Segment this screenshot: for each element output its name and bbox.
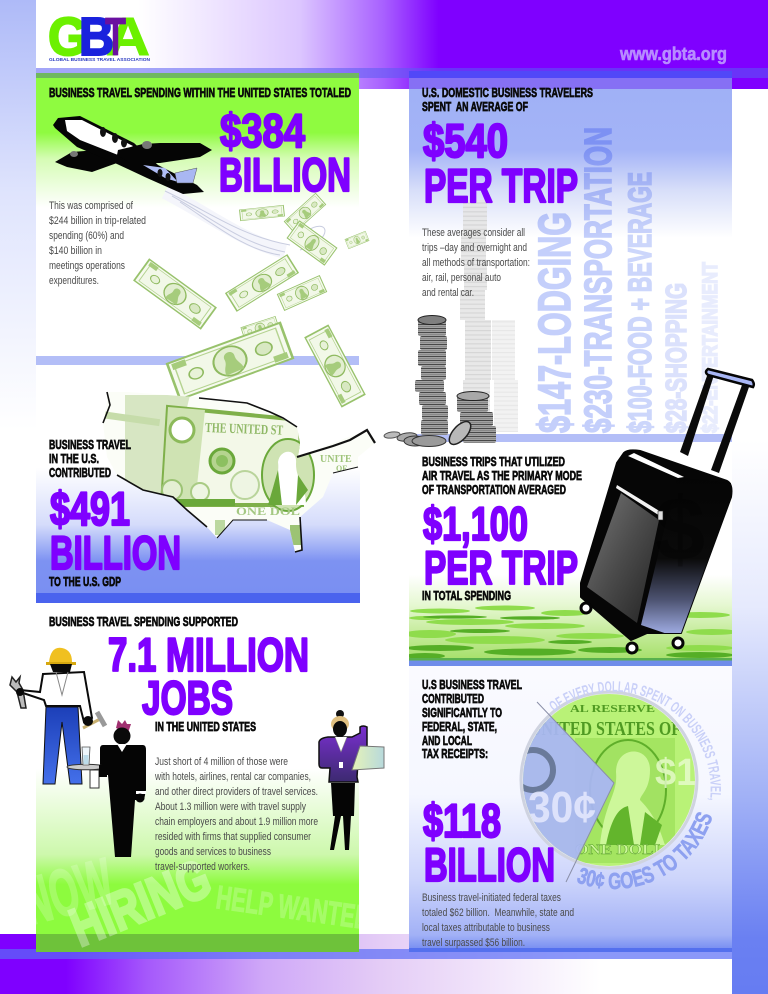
website url: www.gbta.org	[619, 44, 727, 64]
logo: GBTA: G	[48, 7, 88, 67]
icon: dollar pie circle: $1	[655, 752, 697, 794]
icon: airplane	[53, 116, 212, 194]
text block: averages note: all methods of transportation:	[422, 257, 530, 269]
vertical spending breakdown labels: $28-SHOPPING	[661, 283, 693, 433]
big number: $491 billion: BILLION	[50, 526, 181, 579]
text block: taxes detail: travel surpassed $56 billion.	[422, 937, 525, 949]
text block: spending breakdown: spending (60%) and	[49, 230, 124, 242]
icon: luggage: $	[655, 480, 705, 580]
icon: dollar pie circle: AL RESERVE	[570, 704, 655, 715]
text block: jobs detail: goods and services to business	[155, 846, 271, 858]
map: United States filled with dollar bill: ONE DOL	[236, 504, 300, 518]
text block: taxes detail	[422, 892, 574, 949]
curved text: of every dollar: OF EVERY DOLLAR SPENT ON BUSINESS TRAVEL,	[550, 681, 721, 800]
heading: air travel: OF TRANSPORTATION AVERAGED	[422, 482, 566, 497]
heading: taxes: TAX RECEIPTS:	[422, 746, 488, 761]
heading: GDP: BUSINESS TRAVEL	[49, 437, 131, 452]
text block: spending breakdown: $244 billion in trip-related	[49, 215, 146, 227]
logo: GBTA: GLOBAL BUSINESS TRAVEL ASSOCIATION	[49, 57, 151, 62]
logo: GBTA	[48, 7, 151, 67]
heading: GDP: CONTRIBUTED	[49, 465, 111, 480]
big number: $540 per trip	[423, 114, 578, 212]
big number: $384 billion: BILLION	[219, 148, 351, 201]
heading: per trip: U.S. DOMESTIC BUSINESS TRAVELERS	[422, 85, 593, 100]
heading: GDP: IN THE U.S.	[49, 451, 99, 466]
text block: jobs detail: travel-supported workers.	[155, 861, 250, 873]
panel: jobs background	[36, 603, 359, 952]
text block: spending breakdown: expenditures.	[49, 275, 99, 287]
text block: averages note: These averages consider all	[422, 227, 525, 239]
vertical spending breakdown labels	[529, 127, 722, 433]
figure: businesswoman with laptop	[319, 710, 384, 850]
text block: taxes detail: Business travel-initiated federal taxes	[422, 892, 561, 904]
panel: taxes background	[409, 666, 732, 952]
big number: $118 billion: $118	[423, 794, 501, 847]
big number: $384 billion: $384	[220, 104, 305, 157]
text block: jobs detail: with hotels, airlines, rental car companies,	[154, 771, 311, 783]
left side gradient column	[0, 0, 36, 430]
big number: 7.1 million jobs	[108, 628, 309, 724]
panel: total spending background	[36, 73, 359, 365]
heading: per trip	[422, 85, 593, 114]
logo: GBTA: T	[105, 7, 126, 67]
bottom purple banner	[0, 934, 732, 994]
big number: $540 per trip: $540	[423, 114, 508, 167]
big number: $118 billion	[423, 794, 555, 891]
icon: luggage	[581, 369, 754, 653]
text block: spending breakdown: meetings operations	[49, 260, 125, 272]
vertical spending breakdown labels: $147-LODGING	[529, 212, 580, 433]
heading: air travel: AIR TRAVEL AS THE PRIMARY MODE	[422, 468, 582, 483]
icon: ghost coin stacks	[460, 200, 518, 432]
text block: jobs detail: and other direct providers of travel services.	[155, 786, 318, 798]
watermark: now hiring help wanted	[36, 857, 359, 948]
watermark: now hiring help wanted: NOW	[14, 844, 121, 939]
big number: $1,100 per trip	[423, 497, 578, 594]
heading: taxes	[422, 677, 522, 761]
text block: taxes detail: totaled $62 billion. Meanwhile, state and	[422, 907, 574, 919]
text block: averages note: air, rail, personal auto	[422, 272, 501, 284]
map: United States filled with dollar bill: THE UNITED ST	[205, 421, 284, 439]
heading: taxes: AND LOCAL	[422, 733, 472, 748]
vertical spending breakdown labels: $22-ENTERTAINMENT	[699, 262, 722, 433]
text block: jobs detail	[154, 756, 318, 873]
text block: jobs detail: chain employers and about 1.9 million more	[155, 816, 318, 828]
heading: per trip: SPENT AN AVERAGE OF	[422, 99, 528, 114]
vertical spending breakdown labels: $100-FOOD + BEVERAGE	[622, 172, 658, 433]
panel: per trip background	[409, 71, 732, 442]
big number: $1,100 per trip: PER TRIP	[424, 541, 578, 594]
icon: dollar pie circle: ONE DOLL	[575, 842, 665, 858]
vertical spending breakdown labels: $230-TRANSPORTATION	[578, 127, 620, 433]
map: United States filled with dollar bill	[102, 392, 376, 553]
map: United States filled with dollar bill: OF	[336, 464, 347, 473]
text block: averages note: trips –day and overnight and	[422, 242, 527, 254]
big number: $491 billion	[50, 482, 181, 579]
watermark: now hiring help wanted: HELP WANTED	[214, 878, 373, 937]
heading: taxes: U.S BUSINESS TRAVEL	[422, 677, 522, 692]
caption: in the united states: IN THE UNITED STATES	[155, 719, 256, 734]
icon: coin stacks	[384, 316, 496, 448]
text block: averages note: and rental car.	[422, 287, 474, 299]
text block: averages note	[422, 227, 530, 299]
caption: in total spending: IN TOTAL SPENDING	[422, 588, 511, 603]
big number: 7.1 million jobs: JOBS	[142, 671, 233, 724]
caption: to the GDP: TO THE U.S. GDP	[49, 574, 121, 589]
big number: 7.1 million jobs: 7.1 MILLION	[108, 628, 309, 681]
top purple banner	[36, 0, 768, 89]
heading: taxes: FEDERAL, STATE,	[422, 719, 497, 734]
heading: taxes: SIGNIFICANTLY TO	[422, 705, 502, 720]
panel: GDP background	[36, 365, 360, 603]
heading: taxes: CONTRIBUTED	[422, 691, 484, 706]
text block: taxes detail: local taxes attributable to business	[422, 922, 550, 934]
text block: spending breakdown: This was comprised of	[49, 200, 134, 212]
logo: GBTA: B	[79, 7, 114, 67]
icon: dollar pie circle: UNITED STATES OF A	[530, 718, 695, 740]
curved text: 30 cents goes to taxes: 30¢ GOES TO TAXES	[577, 812, 712, 890]
icon: dollar pie circle	[520, 690, 698, 882]
heading: GDP	[49, 437, 131, 480]
big number: $118 billion: BILLION	[424, 838, 555, 891]
logo: GBTA: A	[106, 7, 150, 67]
figure: construction worker	[10, 648, 105, 784]
big number: $1,100 per trip: $1,100	[423, 497, 528, 550]
text block: jobs detail: About 1.3 million were with travel supply	[155, 801, 306, 813]
panel: air travel money ground	[404, 575, 738, 666]
big number: $540 per trip: PER TRIP	[424, 159, 578, 212]
heading: air travel	[422, 454, 582, 497]
figure: waiter	[67, 720, 146, 857]
text block: spending breakdown: $140 billion in	[49, 245, 102, 257]
text block: jobs detail: Just short of 4 million of those were	[155, 756, 288, 768]
map: United States filled with dollar bill: UNITE	[320, 454, 352, 465]
text block: spending breakdown	[49, 200, 146, 287]
right side gradient column	[732, 440, 768, 994]
big number: $384 billion	[219, 104, 351, 201]
big number: $491 billion: $491	[50, 482, 130, 535]
heading: air travel: BUSINESS TRIPS THAT UTILIZED	[422, 454, 565, 469]
icon: contrail	[165, 191, 325, 255]
heading: jobs: BUSINESS TRAVEL SPENDING SUPPORTED	[49, 614, 238, 629]
heading: total spending: BUSINESS TRAVEL SPENDING WITHIN THE UNITED STATES TOTALED	[49, 85, 351, 100]
icon: dollar pie circle: 30¢	[528, 783, 596, 832]
icon: falling dollar bills	[134, 193, 369, 407]
text block: jobs detail: resided with firms that supplied consumer	[155, 831, 311, 843]
watermark: now hiring help wanted: HIRING	[62, 848, 219, 958]
